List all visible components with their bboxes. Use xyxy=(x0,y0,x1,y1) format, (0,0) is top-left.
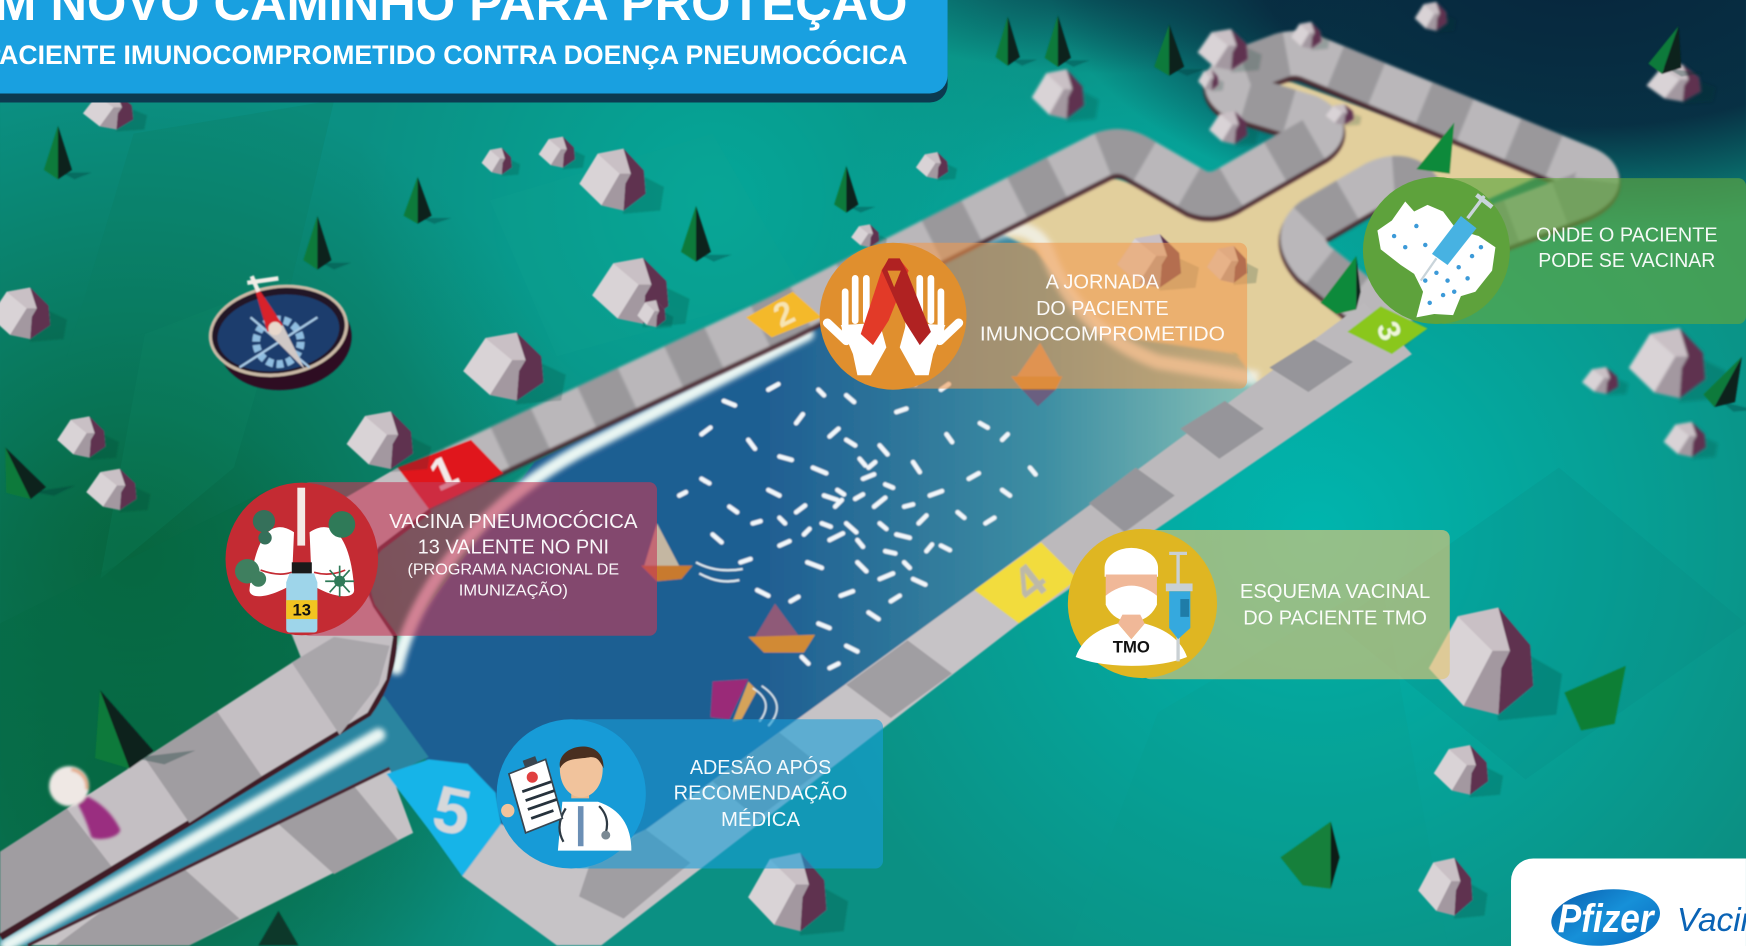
board tile 4: 4 xyxy=(1002,553,1057,613)
icon: doctor with clipboard xyxy=(497,719,646,869)
sparkles on the water xyxy=(679,379,1036,668)
panel 3: onde vacinar xyxy=(1363,177,1746,324)
board tile 2 xyxy=(746,292,822,337)
panel 5 text: ADESÃO APÓS xyxy=(690,755,831,779)
game pawn xyxy=(49,766,120,839)
panel 2: a jornada do paciente xyxy=(820,243,1247,390)
vial number: 13 xyxy=(293,601,311,620)
board tile 1 xyxy=(398,440,503,509)
rocks xyxy=(0,92,1562,935)
panel 1 text: VACINA PNEUMOCÓCICA xyxy=(389,510,638,533)
board tile 5: 5 xyxy=(427,772,477,850)
near-bottom board path xyxy=(28,768,413,945)
foam edge xyxy=(7,334,807,945)
subtitle: PACIENTE IMUNOCOMPROMETIDO CONTRA DOENÇA PNEUMOCÓCICA xyxy=(0,39,908,70)
icon: hands with red ribbon xyxy=(820,243,967,390)
water channel xyxy=(0,228,1269,945)
panel 1 text xyxy=(389,510,638,600)
board tile 3 xyxy=(1347,306,1428,354)
TMO label: TMO xyxy=(1113,637,1150,656)
panel 2 text: IMUNOCOMPROMETIDO xyxy=(980,323,1225,346)
Pfizer logo card xyxy=(1511,858,1746,946)
narrow lower channel xyxy=(0,696,429,945)
panel 1 text: IMUNIZAÇÃO) xyxy=(459,580,568,600)
path from 3 to 4 xyxy=(974,303,1412,624)
board tile 5 xyxy=(386,759,501,876)
icon: lungs with vaccine vial xyxy=(226,483,378,635)
board tile 4 xyxy=(974,542,1078,624)
board tile 3: 3 xyxy=(1370,317,1408,345)
panel 3 text: ONDE O PACIENTE xyxy=(1536,224,1718,247)
panel 4 text: DO PACIENTE TMO xyxy=(1243,607,1427,630)
panel 2 text: DO PACIENTE xyxy=(1036,297,1169,320)
boats xyxy=(641,343,1062,726)
board tile 1: 1 xyxy=(423,446,465,501)
panel 1 text: 13 VALENTE NO PNI xyxy=(418,535,609,558)
path from 4 to 5 xyxy=(462,590,1019,945)
board tile 2: 2 xyxy=(768,294,801,335)
panel 5: adesão xyxy=(497,719,883,869)
distant rocks xyxy=(1032,2,1726,459)
compass xyxy=(203,276,358,399)
sand beach xyxy=(985,78,1548,384)
panel 3 text: PODE SE VACINAR xyxy=(1538,249,1715,272)
Pfizer oval xyxy=(1548,884,1663,946)
panel 4 text xyxy=(1240,580,1430,630)
Pfizer logo card: Pfizer xyxy=(1558,897,1656,941)
panel 2 text xyxy=(980,270,1225,346)
icon: Brazil map with syringe xyxy=(1363,177,1510,324)
panel 2 text: A JORNADA xyxy=(1046,270,1159,293)
panel 3 text xyxy=(1536,224,1718,272)
panel 5 text: MÉDICA xyxy=(721,808,800,831)
panel 4: esquema vacinal xyxy=(1068,529,1450,679)
near-left board path xyxy=(0,468,429,936)
header banner xyxy=(0,0,948,102)
panel 1: vacina pneumocócica xyxy=(226,482,657,636)
panel 5 text: RECOMENDAÇÃO xyxy=(674,780,847,804)
panel 1 text: (PROGRAMA NACIONAL DE xyxy=(408,561,619,579)
panel 5 text xyxy=(674,755,847,831)
far board path xyxy=(413,53,1597,491)
icon: TMO patient with syringe xyxy=(1068,529,1217,678)
panel 4 text: ESQUEMA VACINAL xyxy=(1240,580,1430,603)
